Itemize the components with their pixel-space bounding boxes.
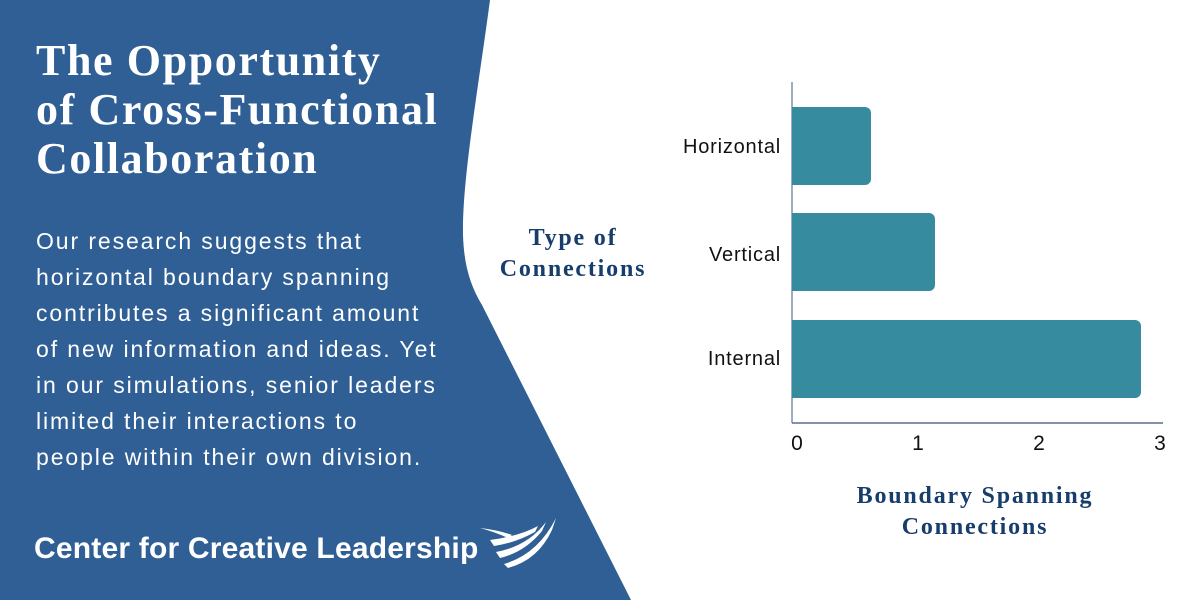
x-axis title xyxy=(857,483,1093,540)
x-axis title: Connections xyxy=(902,514,1048,540)
y-axis title: Connections xyxy=(500,256,646,282)
text block: description: in our simulations, senior leaders xyxy=(36,372,437,398)
text block: description: Our research suggests that xyxy=(36,228,363,254)
text block: description: contributes a significant amount xyxy=(36,300,420,326)
y-axis title xyxy=(500,225,646,282)
bar chart: 1 xyxy=(912,432,924,455)
y-axis title: Type of xyxy=(529,225,617,251)
icon: logo swoosh xyxy=(480,518,556,568)
title: Collaboration xyxy=(36,134,318,183)
bar chart: Vertical xyxy=(709,244,781,266)
bar chart: Internal xyxy=(708,348,781,370)
title: The Opportunity xyxy=(36,36,382,85)
bar chart: 0 xyxy=(791,432,803,455)
x-axis title: Boundary Spanning xyxy=(857,483,1093,509)
title: of Cross-Functional xyxy=(36,85,438,134)
bar chart xyxy=(683,82,1166,455)
text block: description: horizontal boundary spanning xyxy=(36,264,391,290)
title xyxy=(36,36,438,183)
text block: description: of new information and ideas. Yet xyxy=(36,336,438,362)
text block: description: people within their own division. xyxy=(36,444,422,470)
logo: Center for Creative Leadership xyxy=(34,518,556,568)
bar chart: 2 xyxy=(1033,432,1045,455)
logo: Center for Creative Leadership: Center for Creative Leadership xyxy=(34,532,478,565)
text block: description: limited their interactions to xyxy=(36,408,358,434)
bar chart: 3 xyxy=(1154,432,1166,455)
bar chart: Horizontal xyxy=(683,136,781,158)
text block: description xyxy=(36,228,438,470)
